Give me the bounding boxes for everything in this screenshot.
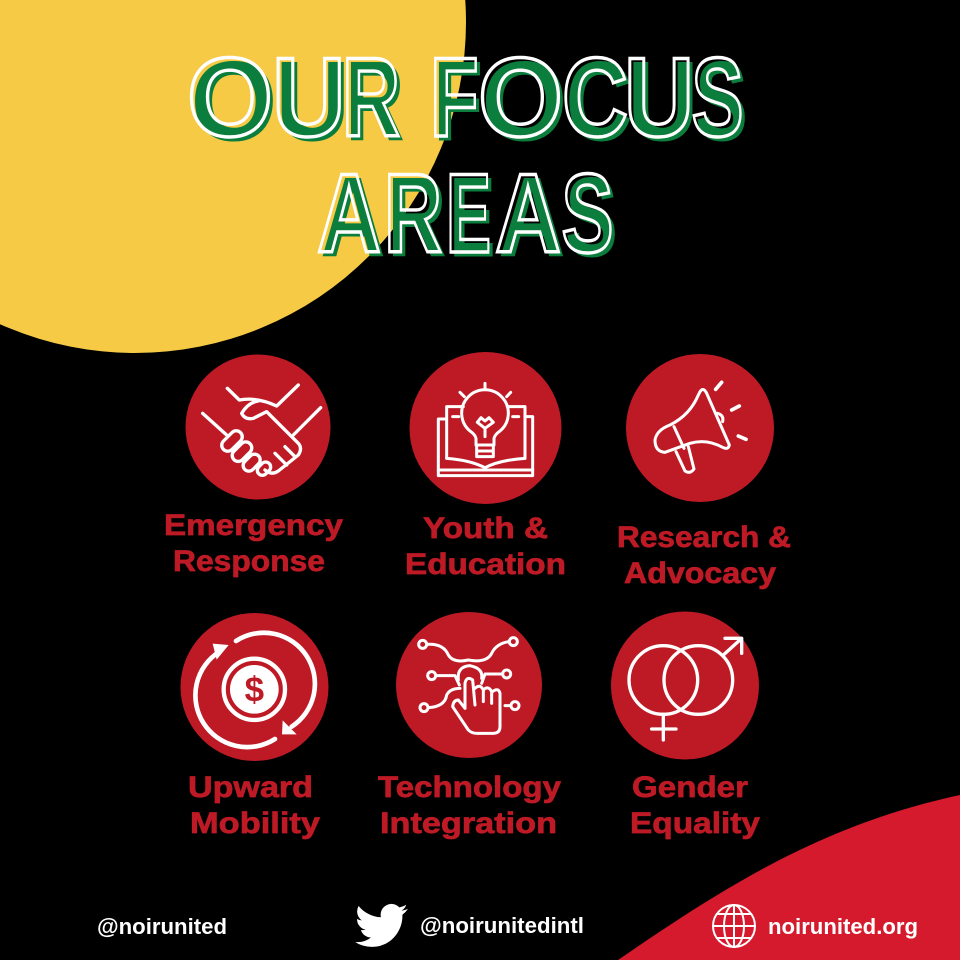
- item: Youth & Education: [405, 352, 566, 581]
- title: U: [276, 39, 350, 164]
- circle badge: money cycle: [180, 613, 328, 761]
- title: S: [566, 155, 618, 280]
- title: U: [272, 35, 346, 160]
- circle badge: touch circuit: [396, 612, 542, 758]
- title: E: [446, 151, 491, 276]
- icon: dollar coin with circular arrows: [195, 633, 315, 747]
- label: Advocacy: [624, 557, 776, 590]
- label: [164, 509, 343, 578]
- label: Upward: [188, 771, 313, 804]
- item: Emergency Response: [164, 354, 343, 578]
- footer handle: noirunited: @noirunited: [97, 914, 227, 939]
- title: O: [478, 35, 563, 160]
- item: Upward Mobility: [180, 613, 328, 840]
- title: R: [342, 35, 400, 160]
- title: U: [628, 39, 698, 164]
- title: A: [317, 151, 381, 276]
- label: Mobility: [190, 807, 320, 840]
- title: F: [434, 39, 483, 164]
- footer website: noirunited.org: [768, 914, 918, 939]
- title: R: [384, 151, 442, 276]
- title: E: [450, 155, 495, 280]
- label: Technology: [378, 771, 561, 804]
- label: [617, 521, 791, 590]
- label: Emergency: [164, 509, 343, 542]
- title: A: [495, 151, 561, 276]
- item: Technology Integration: [378, 612, 561, 840]
- label: Gender: [632, 771, 748, 804]
- circle badge: handshake: [186, 354, 330, 500]
- icon: hand touching circuit nodes: [419, 638, 519, 733]
- icon: globe: [713, 905, 755, 947]
- label: Research &: [617, 521, 791, 554]
- label: [378, 771, 561, 840]
- label: [405, 512, 566, 581]
- label: Integration: [380, 807, 557, 840]
- title: O: [191, 39, 277, 164]
- icon: lightbulb over open book: [438, 383, 533, 476]
- circle badge: megaphone: [626, 354, 774, 502]
- title: S: [562, 151, 614, 276]
- title: U: [624, 35, 694, 160]
- label: Education: [405, 548, 566, 581]
- footer handle: noirunitedintl: @noirunitedintl: [420, 913, 584, 938]
- red bottom-right corner shape: [618, 795, 960, 960]
- yellow corner circle: [0, 0, 466, 353]
- title: S: [696, 39, 748, 164]
- item: Gender Equality: [611, 612, 760, 840]
- icon: megaphone: [655, 382, 746, 472]
- label: [630, 771, 760, 840]
- label: Response: [173, 545, 325, 578]
- icon: twitter bird: [355, 904, 408, 947]
- title: F: [430, 35, 479, 160]
- circle badge: gender symbols: [611, 612, 759, 760]
- label: [188, 771, 320, 840]
- title: R: [388, 155, 446, 280]
- label: Equality: [630, 807, 760, 840]
- icon: handshake: [203, 385, 321, 477]
- icon: interlocked gender symbols: [629, 638, 742, 740]
- title: C: [566, 39, 632, 164]
- title: S: [692, 35, 744, 160]
- title: O: [187, 35, 273, 160]
- title: R: [346, 39, 404, 164]
- item: Research & Advocacy: [617, 354, 791, 590]
- label: Youth &: [423, 512, 548, 545]
- circle badge: lightbulb and book: [410, 352, 562, 504]
- title: C: [562, 35, 628, 160]
- icon: dollar coin with circular arrows: $: [245, 671, 264, 710]
- title: A: [321, 155, 385, 280]
- title: [187, 35, 748, 280]
- title: O: [482, 39, 567, 164]
- title: A: [499, 155, 565, 280]
